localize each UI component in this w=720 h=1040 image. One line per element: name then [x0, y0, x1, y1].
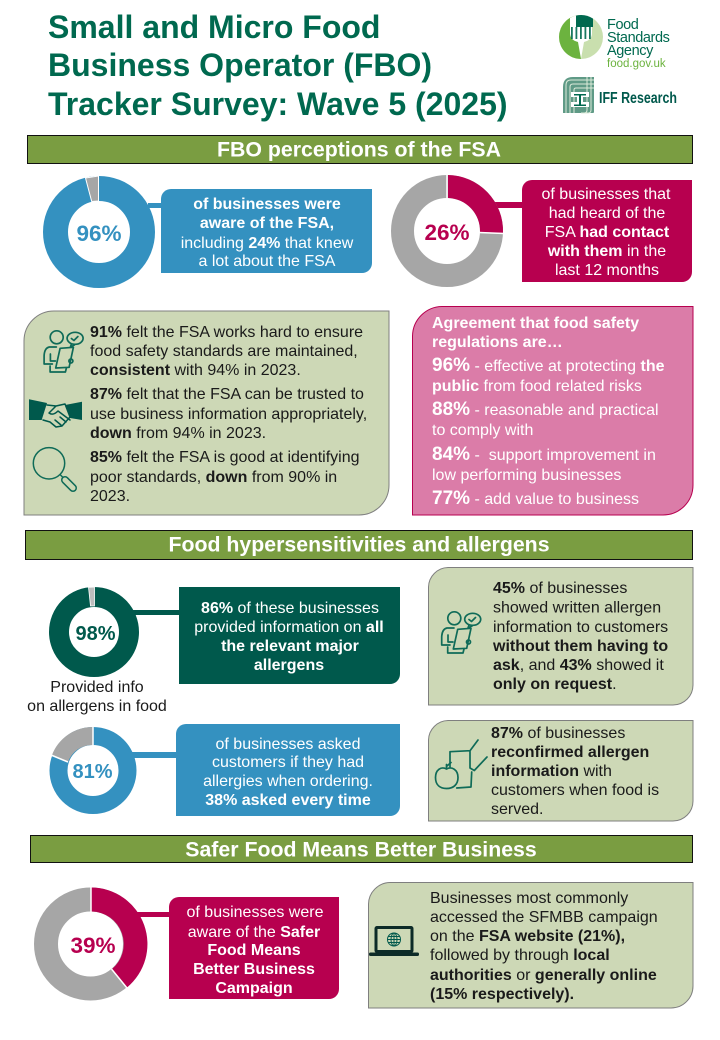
text: reconfirmed statistics: reconfirmed allergen [491, 744, 649, 761]
text: reconfirmed statistics: 87% of businesses [491, 725, 625, 742]
caption: provided info: on allergens in food [27, 698, 167, 715]
icon: apple and checklist [436, 740, 487, 788]
text: written allergen statistics: 45% of businesses [493, 580, 627, 597]
connector: allergen info [128, 610, 182, 615]
section heading: Safer Food Means Better Business [30, 836, 692, 862]
donut chart: 98% provided info [59, 587, 129, 667]
callout: aware of SFMBB: aware of the Safer [188, 924, 320, 941]
donut chart: 26% had contact: 26% [424, 220, 470, 245]
callout: had contact with the FSA [522, 180, 692, 282]
donut chart: 81% asked customers [51, 726, 128, 805]
text: perception statistics: down from 94% in 2023. [90, 425, 266, 442]
text: perception statistics: 85% felt the FSA is good at identifying [90, 449, 360, 466]
panel: food safety regulations: 77% - add value to business [432, 488, 639, 509]
donut chart: 39% SFMBB: 39% [70, 933, 116, 958]
callout: 86% all major allergens: the relevant major [221, 638, 359, 655]
callout: had contact with the FSA: with them in the [547, 243, 666, 260]
icon: person with tablet [44, 331, 83, 372]
text: SFMBB access statistics: Businesses most commonly [430, 890, 628, 907]
callout: asked about allergies: of businesses asked [216, 736, 360, 753]
callout: 86% all major allergens [179, 587, 400, 684]
section heading: Food hypersensitivities and allergens: Food hypersensitivities and allergens [168, 532, 550, 556]
text: perception statistics: 87% felt that the FSA can be trusted to [90, 386, 364, 403]
panel: food safety regulations: 88% - reasonable and practical [432, 399, 659, 420]
section heading: FBO perceptions of the FSA [28, 136, 692, 164]
title: Small and Micro Food [48, 9, 380, 45]
title [48, 9, 508, 122]
callout: aware of the FSA [161, 189, 372, 273]
panel: food safety regulations: public from food related risks [432, 378, 642, 395]
callout: aware of SFMBB: Campaign [215, 980, 293, 997]
donut chart: 96% aware [56, 176, 142, 276]
logo: Food Standards Agency: Agency [607, 43, 654, 59]
text: reconfirmed statistics: information with [491, 763, 612, 780]
icon: person with tablet [442, 612, 481, 653]
text: perception statistics: use business information appropriately, [90, 406, 367, 423]
donut chart: 96% aware: 96% [76, 221, 122, 246]
text: reconfirmed statistics [491, 725, 659, 818]
logo: Food Standards Agency: Food [607, 17, 639, 33]
panel: food safety regulations: Agreement that food safety [432, 315, 639, 332]
text: SFMBB access statistics: (15% respectively). [430, 986, 574, 1003]
connector: SFMBB awareness [135, 912, 173, 917]
title: Tracker Survey: Wave 5 (2025) [48, 86, 508, 122]
text: written allergen statistics: showed written allergen [493, 600, 661, 616]
panel: food safety regulations: 96% - effective at protecting the [432, 355, 665, 376]
text: perception statistics: 91% felt the FSA works hard to ensure [90, 324, 363, 341]
callout: 86% all major allergens: allergens [254, 657, 324, 674]
section heading: FBO perceptions of the FSA: FBO perceptions of the FSA [217, 138, 501, 162]
panel: written allergen information [428, 568, 693, 705]
text: perception statistics: food safety standards are maintained, [90, 343, 358, 360]
text: written allergen statistics [492, 580, 668, 693]
text: written allergen statistics: without them having to [492, 638, 668, 655]
text: written allergen statistics: information to customers [493, 619, 668, 636]
callout: aware of SFMBB: Better Business [193, 961, 315, 978]
text: SFMBB access statistics: on the FSA website (21%), [430, 928, 625, 945]
callout: had contact with the FSA: had heard of the [549, 205, 665, 222]
section heading: Food hypersensitivities and allergens [26, 530, 692, 560]
callout: asked about allergies: customers if they had [212, 754, 364, 771]
text: reconfirmed statistics: customers when food is [491, 782, 659, 799]
icon: handshake [29, 399, 82, 427]
icon: magnifying glass [33, 448, 73, 488]
logo: Food Standards Agency: food.gov.uk [607, 58, 666, 70]
donut chart: 81% asked customers: 81% [72, 761, 113, 783]
donut chart: 26% had contact [402, 174, 504, 276]
donut chart: 98% provided info: 98% [75, 623, 116, 645]
title: Business Operator (FBO) [48, 47, 432, 83]
text: reconfirmed statistics: served. [491, 801, 543, 818]
icon: laptop with globe [369, 928, 419, 956]
text: perception statistics [90, 324, 367, 505]
text: SFMBB access statistics [430, 890, 658, 1003]
text: SFMBB access statistics: followed by through local [430, 947, 610, 964]
callout: aware of SFMBB: Food Means [207, 942, 301, 959]
connector: awareness [148, 203, 164, 208]
callout: had contact with the FSA: last 12 months [555, 262, 659, 279]
logo: IFF Research: IFF Research [599, 90, 677, 107]
panel: food safety regulations: regulations are… [432, 334, 563, 351]
callout: had contact with the FSA: FSA had contact [545, 224, 670, 241]
callout: aware of SFMBB [169, 897, 339, 999]
section heading: Safer Food Means Better Business: Safer Food Means Better Business [185, 838, 537, 862]
panel: SFMBB access [368, 882, 693, 1008]
panel: reconfirmed allergen information [428, 720, 693, 821]
panel: food safety regulations [412, 306, 693, 515]
panel: food safety regulations: 84% - support improvement in [432, 444, 656, 465]
callout: aware of the FSA: of businesses were [193, 196, 341, 213]
text: perception statistics: 2023. [90, 488, 130, 505]
text: written allergen statistics: only on request. [493, 676, 617, 693]
caption: provided info [27, 679, 167, 715]
callout: asked about allergies: allergies when ordering. [203, 773, 373, 790]
callout: 86% all major allergens: provided information on all [194, 619, 384, 636]
text: SFMBB access statistics: accessed the SFMBB campaign [430, 909, 658, 926]
logo: Food Standards Agency: Standards [607, 30, 670, 46]
callout: asked about allergies [176, 724, 400, 816]
text: perception statistics: consistent with 94% in 2023. [90, 362, 301, 379]
callout: 86% all major allergens: 86% of these businesses [201, 600, 379, 617]
connector: asked customers [123, 752, 179, 758]
connector: contact [493, 202, 525, 208]
callout: aware of SFMBB: of businesses were [187, 904, 324, 921]
caption: provided info: Provided info [50, 679, 144, 696]
panel: food safety regulations: to comply with [432, 422, 533, 439]
logo: IFF Research [563, 77, 677, 113]
text: written allergen statistics: ask, and 43% showed it [493, 657, 664, 674]
callout: aware of the FSA: a lot about the FSA [199, 253, 336, 270]
callout: aware of the FSA: aware of the FSA, [200, 215, 334, 232]
donut chart: 39% SFMBB [46, 887, 147, 988]
callout: aware of the FSA: including 24% that knew [181, 235, 354, 252]
text: SFMBB access statistics: authorities or generally online [430, 967, 657, 984]
panel: food safety regulations: low performing businesses [432, 467, 621, 484]
panel: FSA perceptions [24, 311, 389, 515]
logo: Food Standards Agency [559, 15, 670, 70]
callout: had contact with the FSA: of businesses that [542, 186, 671, 203]
callout: asked about allergies: 38% asked every time [205, 792, 371, 809]
text: perception statistics: poor standards, down from 90% in [90, 469, 337, 486]
